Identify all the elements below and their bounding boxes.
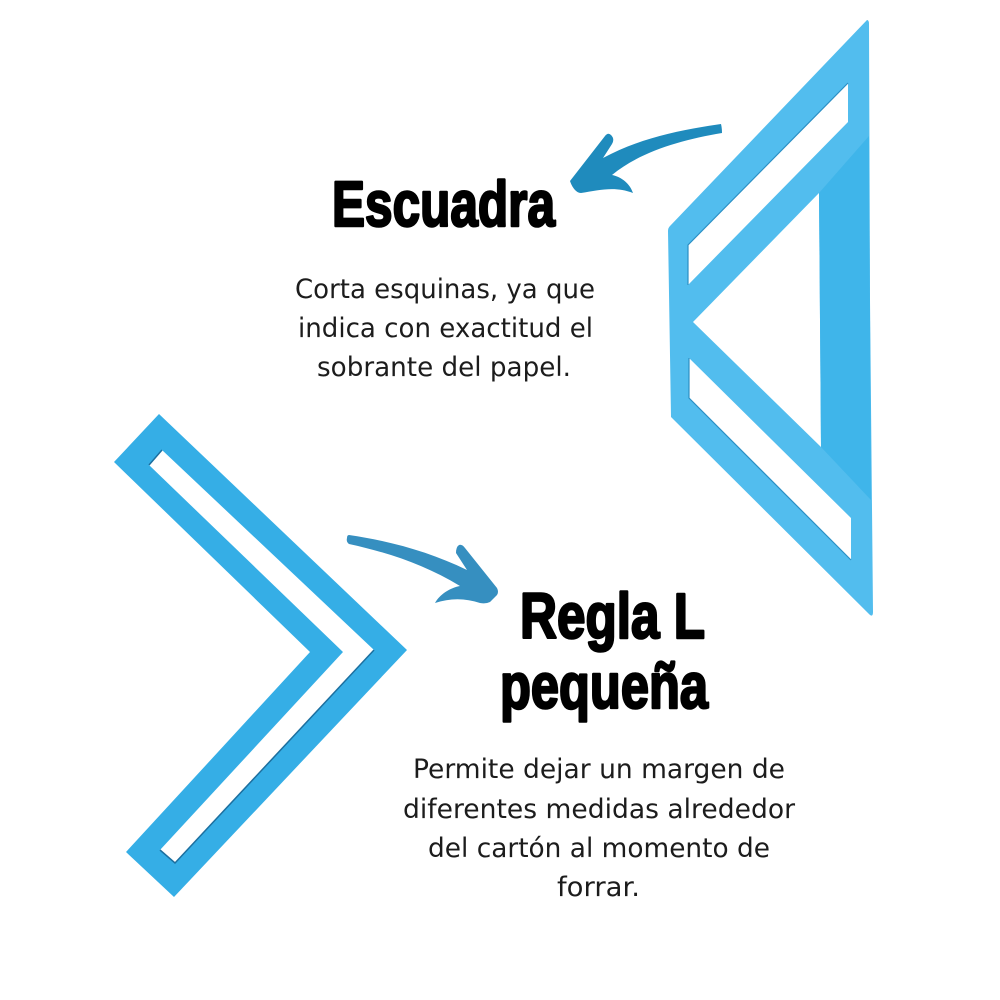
text block: Escuadra description: indica con exactitud el: [298, 313, 593, 344]
text block: Escuadra description: sobrante del papel.: [317, 352, 571, 383]
arrow: pointing to Regla L: [347, 535, 498, 603]
arrow: pointing to Escuadra: [570, 124, 722, 193]
heading: Regla L pequeña: [500, 580, 708, 722]
text block: Regla L description: Permite dejar un margen de: [413, 754, 785, 785]
heading: Escuadra: Escuadra: [332, 168, 555, 240]
text block: Regla L description: [403, 754, 796, 903]
text block: Regla L description: diferentes medidas alrededor: [403, 794, 796, 825]
heading: Regla L pequeña: Regla L: [520, 580, 705, 652]
heading: Regla L pequeña: pequeña: [500, 650, 708, 722]
text block: Regla L description: forrar.: [557, 872, 640, 903]
icon: escuadra set square: [668, 20, 873, 616]
text block: Escuadra description: [295, 274, 595, 383]
text block: Regla L description: del cartón al momento de: [428, 833, 770, 864]
text block: Escuadra description: Corta esquinas, ya que: [295, 274, 595, 305]
icon: small L ruler: [114, 414, 407, 897]
